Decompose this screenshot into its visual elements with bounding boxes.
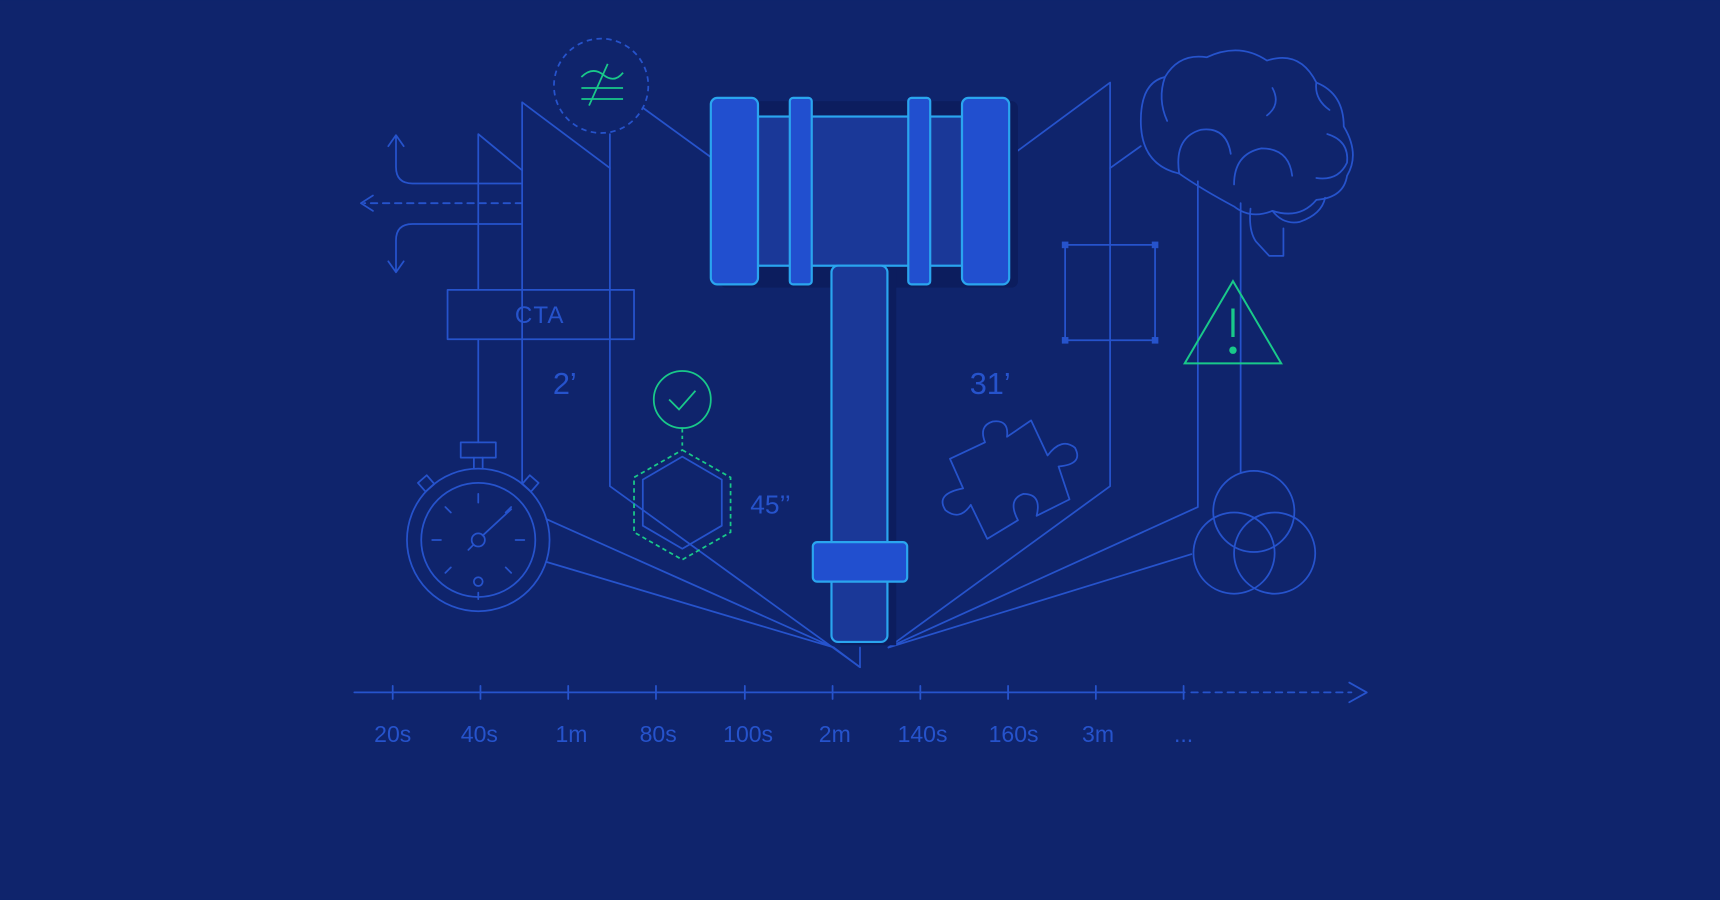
- dotted circle: not-equal: [554, 39, 648, 133]
- timeline labels: 3m: [1082, 721, 1114, 747]
- venn circles: [1193, 471, 1315, 594]
- square: [1062, 242, 1158, 344]
- timeline labels: ...: [1174, 721, 1193, 747]
- hexagon inner: [643, 457, 722, 549]
- CTA box: [448, 290, 634, 339]
- numeric labels: [553, 366, 1011, 520]
- timeline labels: 100s: [723, 721, 773, 747]
- left flag structure: [478, 102, 860, 667]
- right structure: [834, 83, 1241, 667]
- check circle and dashed hexagon: [634, 371, 731, 560]
- timeline labels: 40s: [461, 721, 498, 747]
- brain: [1141, 50, 1353, 256]
- timeline labels: [374, 721, 1193, 747]
- warning triangle: [1185, 281, 1281, 363]
- timeline: [354, 683, 1367, 702]
- stopwatch: [407, 442, 550, 611]
- puzzle piece: [943, 420, 1077, 539]
- timeline labels: 2m: [819, 721, 851, 747]
- numeric labels: 2’: [553, 366, 577, 401]
- gavel: [711, 98, 1018, 645]
- numeric labels: 45’’: [750, 490, 791, 520]
- timeline labels: 140s: [898, 721, 947, 747]
- timeline labels: 1m: [556, 721, 587, 747]
- timeline labels: 20s: [374, 721, 411, 747]
- numeric labels: 31’: [970, 366, 1011, 401]
- arrows left: [361, 135, 522, 272]
- timeline labels: 160s: [989, 721, 1039, 747]
- CTA box: CTA: [515, 302, 565, 329]
- timeline labels: 80s: [640, 721, 677, 747]
